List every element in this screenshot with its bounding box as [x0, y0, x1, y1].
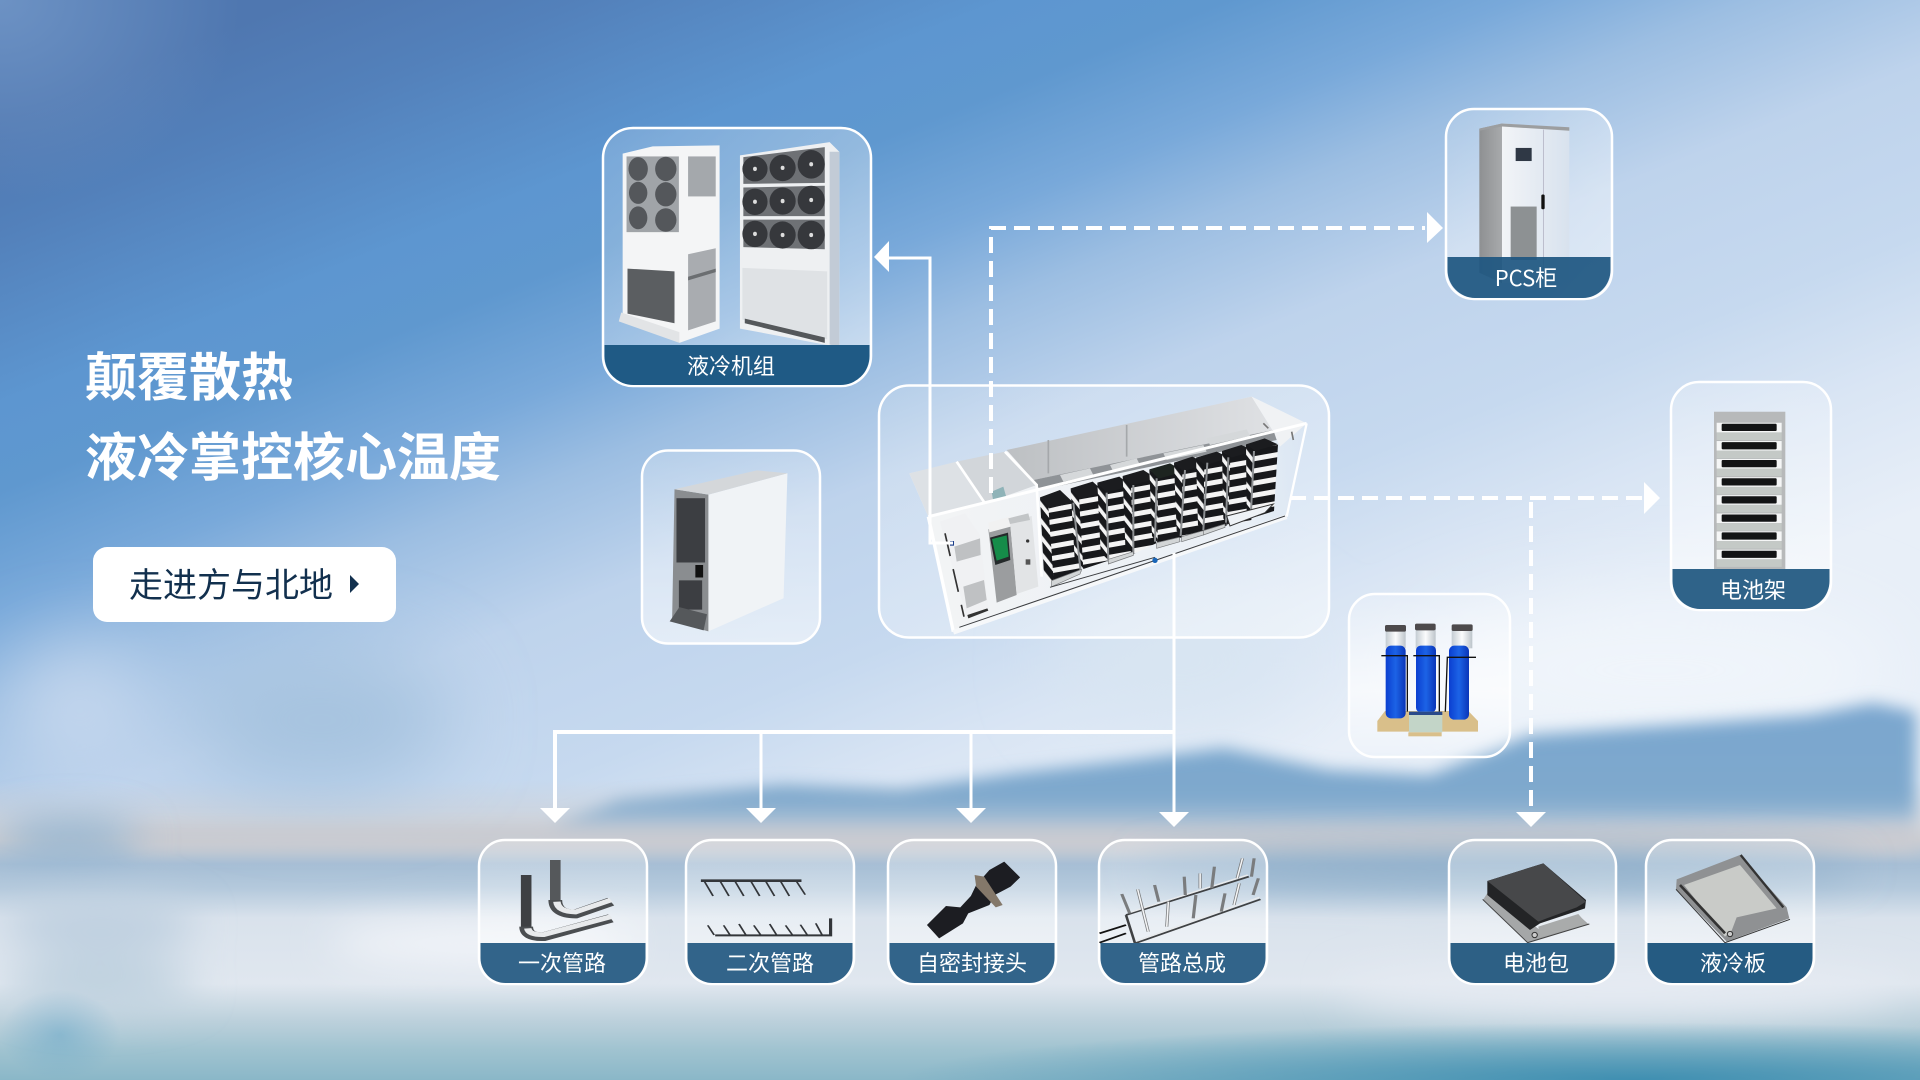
icon: secondary piping	[701, 881, 831, 935]
icon: three blue coolant tubes	[1377, 624, 1478, 736]
label: 管路总成: 管路总成	[1138, 946, 1226, 978]
panel: PCS柜	[1446, 109, 1612, 299]
title	[85, 350, 501, 488]
title: 液冷掌控核心温度	[85, 430, 501, 488]
label: 一次管路: 一次管路	[518, 946, 606, 978]
panel: coolant tubes	[1349, 594, 1510, 757]
label: 二次管路	[688, 943, 852, 983]
icon: self-sealing connector	[927, 862, 1020, 938]
panel: 电池包	[1449, 840, 1616, 984]
arrows: solid branches to piping	[540, 553, 1189, 827]
label: 液冷机组	[604, 345, 870, 385]
icon: chiller units	[619, 142, 839, 346]
label: 液冷板: 液冷板	[1700, 946, 1766, 978]
label: 管路总成	[1100, 943, 1266, 983]
panel: 液冷板	[1646, 840, 1814, 984]
left equipment cabinets	[940, 513, 1038, 618]
label: 液冷机组: 液冷机组	[687, 349, 775, 381]
label: 二次管路: 二次管路	[726, 946, 814, 978]
connectors	[540, 212, 1660, 827]
panel: 电池架	[1671, 382, 1831, 610]
container frame	[928, 423, 1307, 517]
panel: 二次管路	[686, 840, 854, 984]
panel: 液冷机组	[603, 128, 871, 386]
label: 电池包: 电池包	[1503, 946, 1569, 978]
arrow: to chiller unit	[874, 241, 953, 543]
panel: outdoor cabinet unit	[642, 450, 820, 644]
label: 电池架	[1672, 569, 1830, 609]
button: 走进方与北地	[93, 547, 396, 622]
icon: cabinet unit	[670, 470, 787, 631]
arrow: dashed to PCS cabinet	[991, 212, 1443, 493]
icon: cold plate	[1676, 855, 1790, 943]
label: 电池包	[1450, 943, 1614, 983]
icon: open energy storage container	[909, 397, 1307, 632]
label: 自密封接头	[890, 943, 1054, 983]
icon: primary piping	[526, 860, 611, 937]
icon: battery rack	[1714, 412, 1785, 584]
label: 一次管路	[480, 943, 646, 983]
title: 颠覆散热	[85, 350, 293, 408]
panel: container	[879, 386, 1329, 638]
label: PCS柜: PCS柜	[1495, 261, 1557, 293]
icon: battery pack	[1483, 863, 1589, 943]
panel: 一次管路	[479, 840, 647, 984]
button: 走进方与北地: 走进方与北地	[129, 567, 333, 605]
arrow: dashed to battery pack	[1516, 502, 1546, 827]
label: 电池架: 电池架	[1720, 573, 1786, 605]
label: PCS柜	[1448, 257, 1610, 298]
label: 液冷板	[1648, 943, 1812, 983]
panel: 管路总成	[1099, 840, 1267, 984]
arrow: dashed to battery rack	[1290, 482, 1660, 514]
battery racks	[1040, 438, 1278, 587]
icon: PCS cabinet	[1479, 123, 1569, 283]
icon: piping assembly	[1100, 858, 1260, 943]
label: 自密封接头: 自密封接头	[917, 946, 1027, 978]
panel: 自密封接头	[888, 840, 1056, 984]
